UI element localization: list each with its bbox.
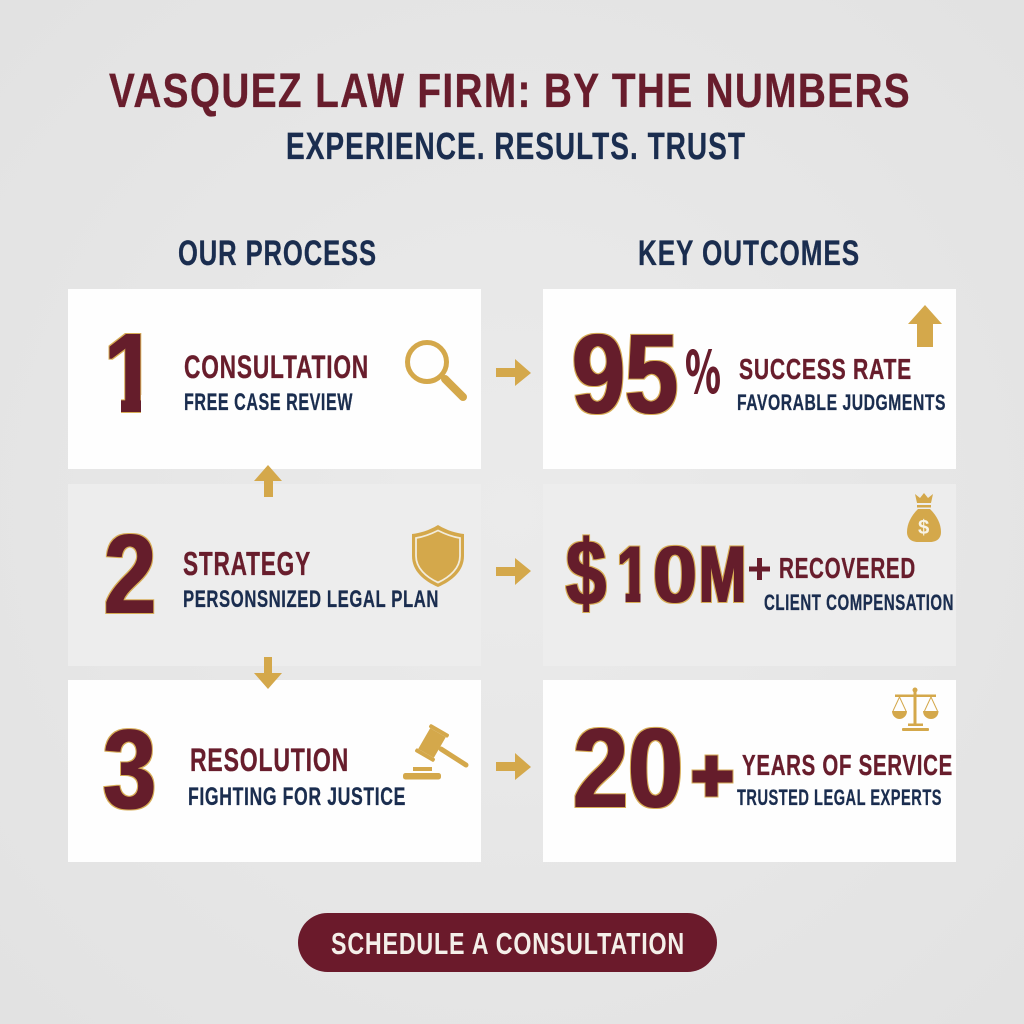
plus sign [692,755,733,797]
panel: years of service [543,680,956,862]
icon: gavel [403,724,466,780]
icon: money bag: $ [918,517,930,539]
outcome 1 description: FAVORABLE JUDGMENTS [737,390,946,415]
arrow: step 2 to recovered [496,558,531,585]
panel: step 3 resolution [68,680,481,862]
panel: step 1 consultation [68,289,481,469]
step 1 title: CONSULTATION [184,349,369,385]
call to action button: SCHEDULE A CONSULTATION [331,926,685,961]
arrow: step 3 to years of service [496,753,531,780]
step 3 description: FIGHTING FOR JUSTICE [188,783,406,811]
statistic $10M: 0 [653,530,697,620]
arrow: step 2 down to step 3 [254,657,282,689]
step 1 description: FREE CASE REVIEW [184,389,353,416]
outcome 2 title: RECOVERED [779,553,916,585]
step 3 title: RESOLUTION [190,742,349,778]
statistic 20: 20 [573,705,683,831]
step 2 description: PERSONSNIZED LEGAL PLAN [183,586,439,613]
percent sign: % [685,326,721,410]
step number 2: 2 [104,511,156,637]
subtitle: EXPERIENCE. RESULTS. TRUST [286,126,746,168]
step 2 title: STRATEGY [183,545,311,582]
icon: scales of justice [892,688,938,731]
call to action button [298,913,717,972]
plus sign [749,558,770,580]
arrow: step 1 to success rate [496,359,531,386]
statistic $10M: $ [566,520,606,625]
icon: up arrow [908,305,942,347]
icon: magnifying glass [408,342,463,397]
statistic $10M: M [699,530,746,620]
panel: step 2 strategy [68,484,481,666]
outcome 1 title: SUCCESS RATE [739,354,912,386]
icon: shield [412,525,464,587]
heading: our process: OUR PROCESS [178,234,377,273]
statistic $10M: 1 [617,530,649,620]
statistic $10M [565,534,744,613]
panel: success rate [543,289,956,469]
panel: recovered [565,493,953,613]
arrow: step 2 up to step 1 [254,465,282,497]
heading: key outcomes: KEY OUTCOMES [638,234,860,273]
step number 3: 3 [103,706,156,832]
step number 1: 1 [104,310,157,436]
statistic 95: 95 [572,311,678,437]
icon: money bag [907,493,941,542]
